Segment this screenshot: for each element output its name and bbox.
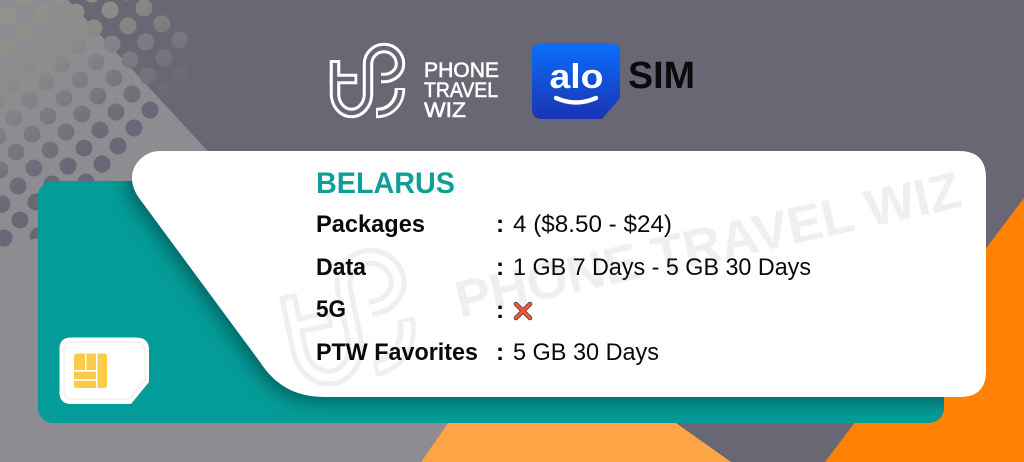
white info card: [132, 151, 986, 397]
row: packages: [316, 211, 672, 238]
row: packages: 4 ($8.50 - $24): [513, 211, 672, 238]
SIM label: SIM: [628, 55, 695, 97]
halftone dot pattern: [0, 0, 190, 246]
logo wordmark: WIZ: [424, 99, 466, 122]
logo wordmark: [424, 59, 499, 122]
icon: red cross: [516, 304, 530, 318]
logo mark: [335, 48, 400, 113]
logo wordmark: TRAVEL: [424, 79, 498, 102]
light orange shape: [421, 423, 731, 462]
white card shadow: [127, 156, 981, 402]
watermark text: PHONE TRAVEL WIZ: [450, 161, 966, 330]
row: PTW favorites: :: [496, 339, 504, 366]
row: 5G: :: [496, 297, 504, 324]
dark orange shape: [825, 198, 1024, 462]
country heading: BELARUS: [316, 167, 455, 200]
watermark logo: [283, 252, 415, 383]
chip contacts: [74, 354, 107, 388]
row: data: Data: [316, 254, 366, 281]
row: data: 1 GB 7 Days - 5 GB 30 Days: [513, 254, 811, 281]
row: 5G: [316, 296, 504, 324]
logo: Phone Travel Wiz: [335, 48, 499, 122]
alo icon: alo: [550, 58, 604, 96]
row: PTW favorites: PTW Favorites: [316, 339, 478, 366]
teal SIM card body: [38, 181, 944, 423]
row: data: :: [496, 254, 504, 281]
icon: SIM chip: [60, 338, 149, 404]
row: packages: :: [496, 211, 504, 238]
row: data: [316, 254, 811, 281]
grey diagonal shape: [0, 0, 448, 462]
row: PTW favorites: 5 GB 30 Days: [513, 339, 659, 366]
logo wordmark: PHONE: [424, 59, 499, 82]
alo icon: [532, 43, 620, 119]
row: packages: Packages: [316, 211, 425, 238]
logo: alo SIM: [532, 43, 695, 119]
row: 5G: 5G: [316, 296, 346, 323]
row: PTW favorites: [316, 339, 659, 366]
